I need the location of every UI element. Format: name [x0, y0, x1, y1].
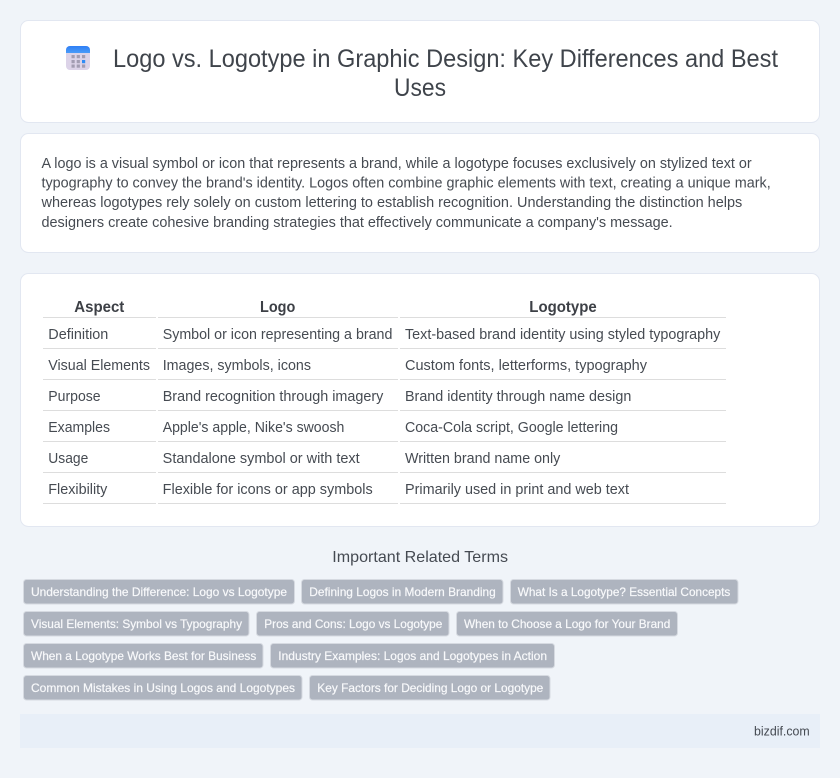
- tag: When a Logotype Works Best: [24, 644, 263, 668]
- tag: When a Logotype Works Best: When a Logotype Works Best for Business: [31, 649, 256, 663]
- table row: Examples: Apple's apple, Nike's swoosh: [163, 420, 344, 436]
- table row: Definition: [43, 327, 726, 349]
- table row: Usage: Usage: [48, 451, 88, 467]
- tag: Industry Examples: Industry Examples: Logos and Logotypes in Action: [278, 649, 547, 663]
- table row: Usage: Written brand name only: [405, 451, 561, 467]
- tag: Key Factors: [310, 676, 550, 700]
- table row: Examples: [43, 420, 726, 442]
- tag: Understanding the Difference: [24, 580, 294, 604]
- table row: Flexibility: [43, 482, 726, 504]
- tag: When to Choose a Logo: When to Choose a Logo for Your Brand: [464, 617, 670, 631]
- table row: Visual Elements: Images, symbols, icons: [163, 358, 311, 374]
- table row: Usage: Standalone symbol or with text: [163, 451, 360, 467]
- table header row: [43, 299, 726, 318]
- table row: Visual Elements: Visual Elements: [48, 358, 150, 374]
- table row: Purpose: Purpose: [48, 389, 101, 405]
- text block: introduction paragraph: typography to convey the brand's identity. Logos often combine graphic elements with text, creating a unique mark,: [42, 176, 771, 192]
- table header row: Aspect: [74, 299, 125, 316]
- table header row: Logotype: [529, 299, 597, 316]
- footer source text: bizdif.com: [754, 723, 810, 738]
- panel: introduction: [20, 134, 820, 252]
- tag: Pros and Cons: [256, 612, 449, 636]
- text block: introduction paragraph: designers create cohesive branding strategies that effectively communicate a company's message.: [42, 215, 673, 231]
- tag: Common Mistakes: [24, 676, 302, 700]
- tag: Visual Elements: [24, 612, 249, 636]
- tag: What Is a Logotype: [510, 580, 738, 604]
- table row: Purpose: [43, 389, 726, 411]
- table row: Flexibility: Flexibility: [48, 482, 108, 498]
- tag: What Is a Logotype: What Is a Logotype? Essential Concepts: [518, 585, 730, 599]
- tag: Industry Examples: [270, 644, 554, 668]
- tag: Defining Logos: [302, 580, 503, 604]
- table row: Examples: Coca-Cola script, Google lettering: [405, 420, 618, 436]
- text block: introduction paragraph: [40, 156, 771, 231]
- heading: related terms: Important Related Terms: [332, 549, 508, 566]
- panel: comparison table: [20, 274, 820, 526]
- table row: Examples: Examples: [48, 420, 110, 436]
- text block: introduction paragraph: whereas logotypes rely solely on custom lettering to establish recognition. Understanding the distinction helps: [40, 195, 742, 211]
- table header row: Logo: [260, 299, 296, 316]
- tag: Defining Logos: Defining Logos in Modern Branding: [309, 585, 496, 599]
- table row: Purpose: Brand recognition through imagery: [163, 389, 384, 405]
- title: Uses: [394, 74, 446, 102]
- table row: Purpose: Brand identity through name design: [405, 389, 631, 405]
- title: [113, 45, 778, 102]
- footer bar: [20, 714, 820, 748]
- table row: Definition: Definition: [48, 327, 108, 343]
- table row: Visual Elements: [43, 358, 726, 380]
- tag: Common Mistakes: Common Mistakes in Using Logos and Logotypes: [31, 681, 295, 695]
- panel: title header: [20, 20, 820, 122]
- table row: Usage: [43, 451, 726, 473]
- tag: Pros and Cons: Pros and Cons: Logo vs Logotype: [264, 617, 443, 631]
- table row: Flexibility: Flexible for icons or app symbols: [163, 482, 373, 498]
- tag: Understanding the Difference: Understanding the Difference: Logo vs Logotype: [31, 585, 287, 599]
- tag: When to Choose a Logo: [456, 612, 678, 636]
- table row: Definition: Symbol or icon representing a brand: [163, 327, 392, 343]
- text block: introduction paragraph: A logo is a visual symbol or icon that represents a brand, while a logotype focuses exclusively on stylized text or: [42, 156, 752, 172]
- tag: Visual Elements: Visual Elements: Symbol vs Typography: [31, 617, 242, 631]
- icon: calendar: [66, 46, 90, 70]
- panel: related term tags: [24, 580, 738, 700]
- table row: Visual Elements: Custom fonts, letterforms, typography: [405, 358, 648, 374]
- title: Logo vs. Logotype in Graphic Design: Key Differences and Best: [113, 45, 778, 73]
- tag: Key Factors: Key Factors for Deciding Logo or Logotype: [317, 681, 544, 695]
- table row: Flexibility: Primarily used in print and web text: [405, 482, 629, 498]
- table row: Definition: Text-based brand identity using styled typography: [405, 327, 721, 343]
